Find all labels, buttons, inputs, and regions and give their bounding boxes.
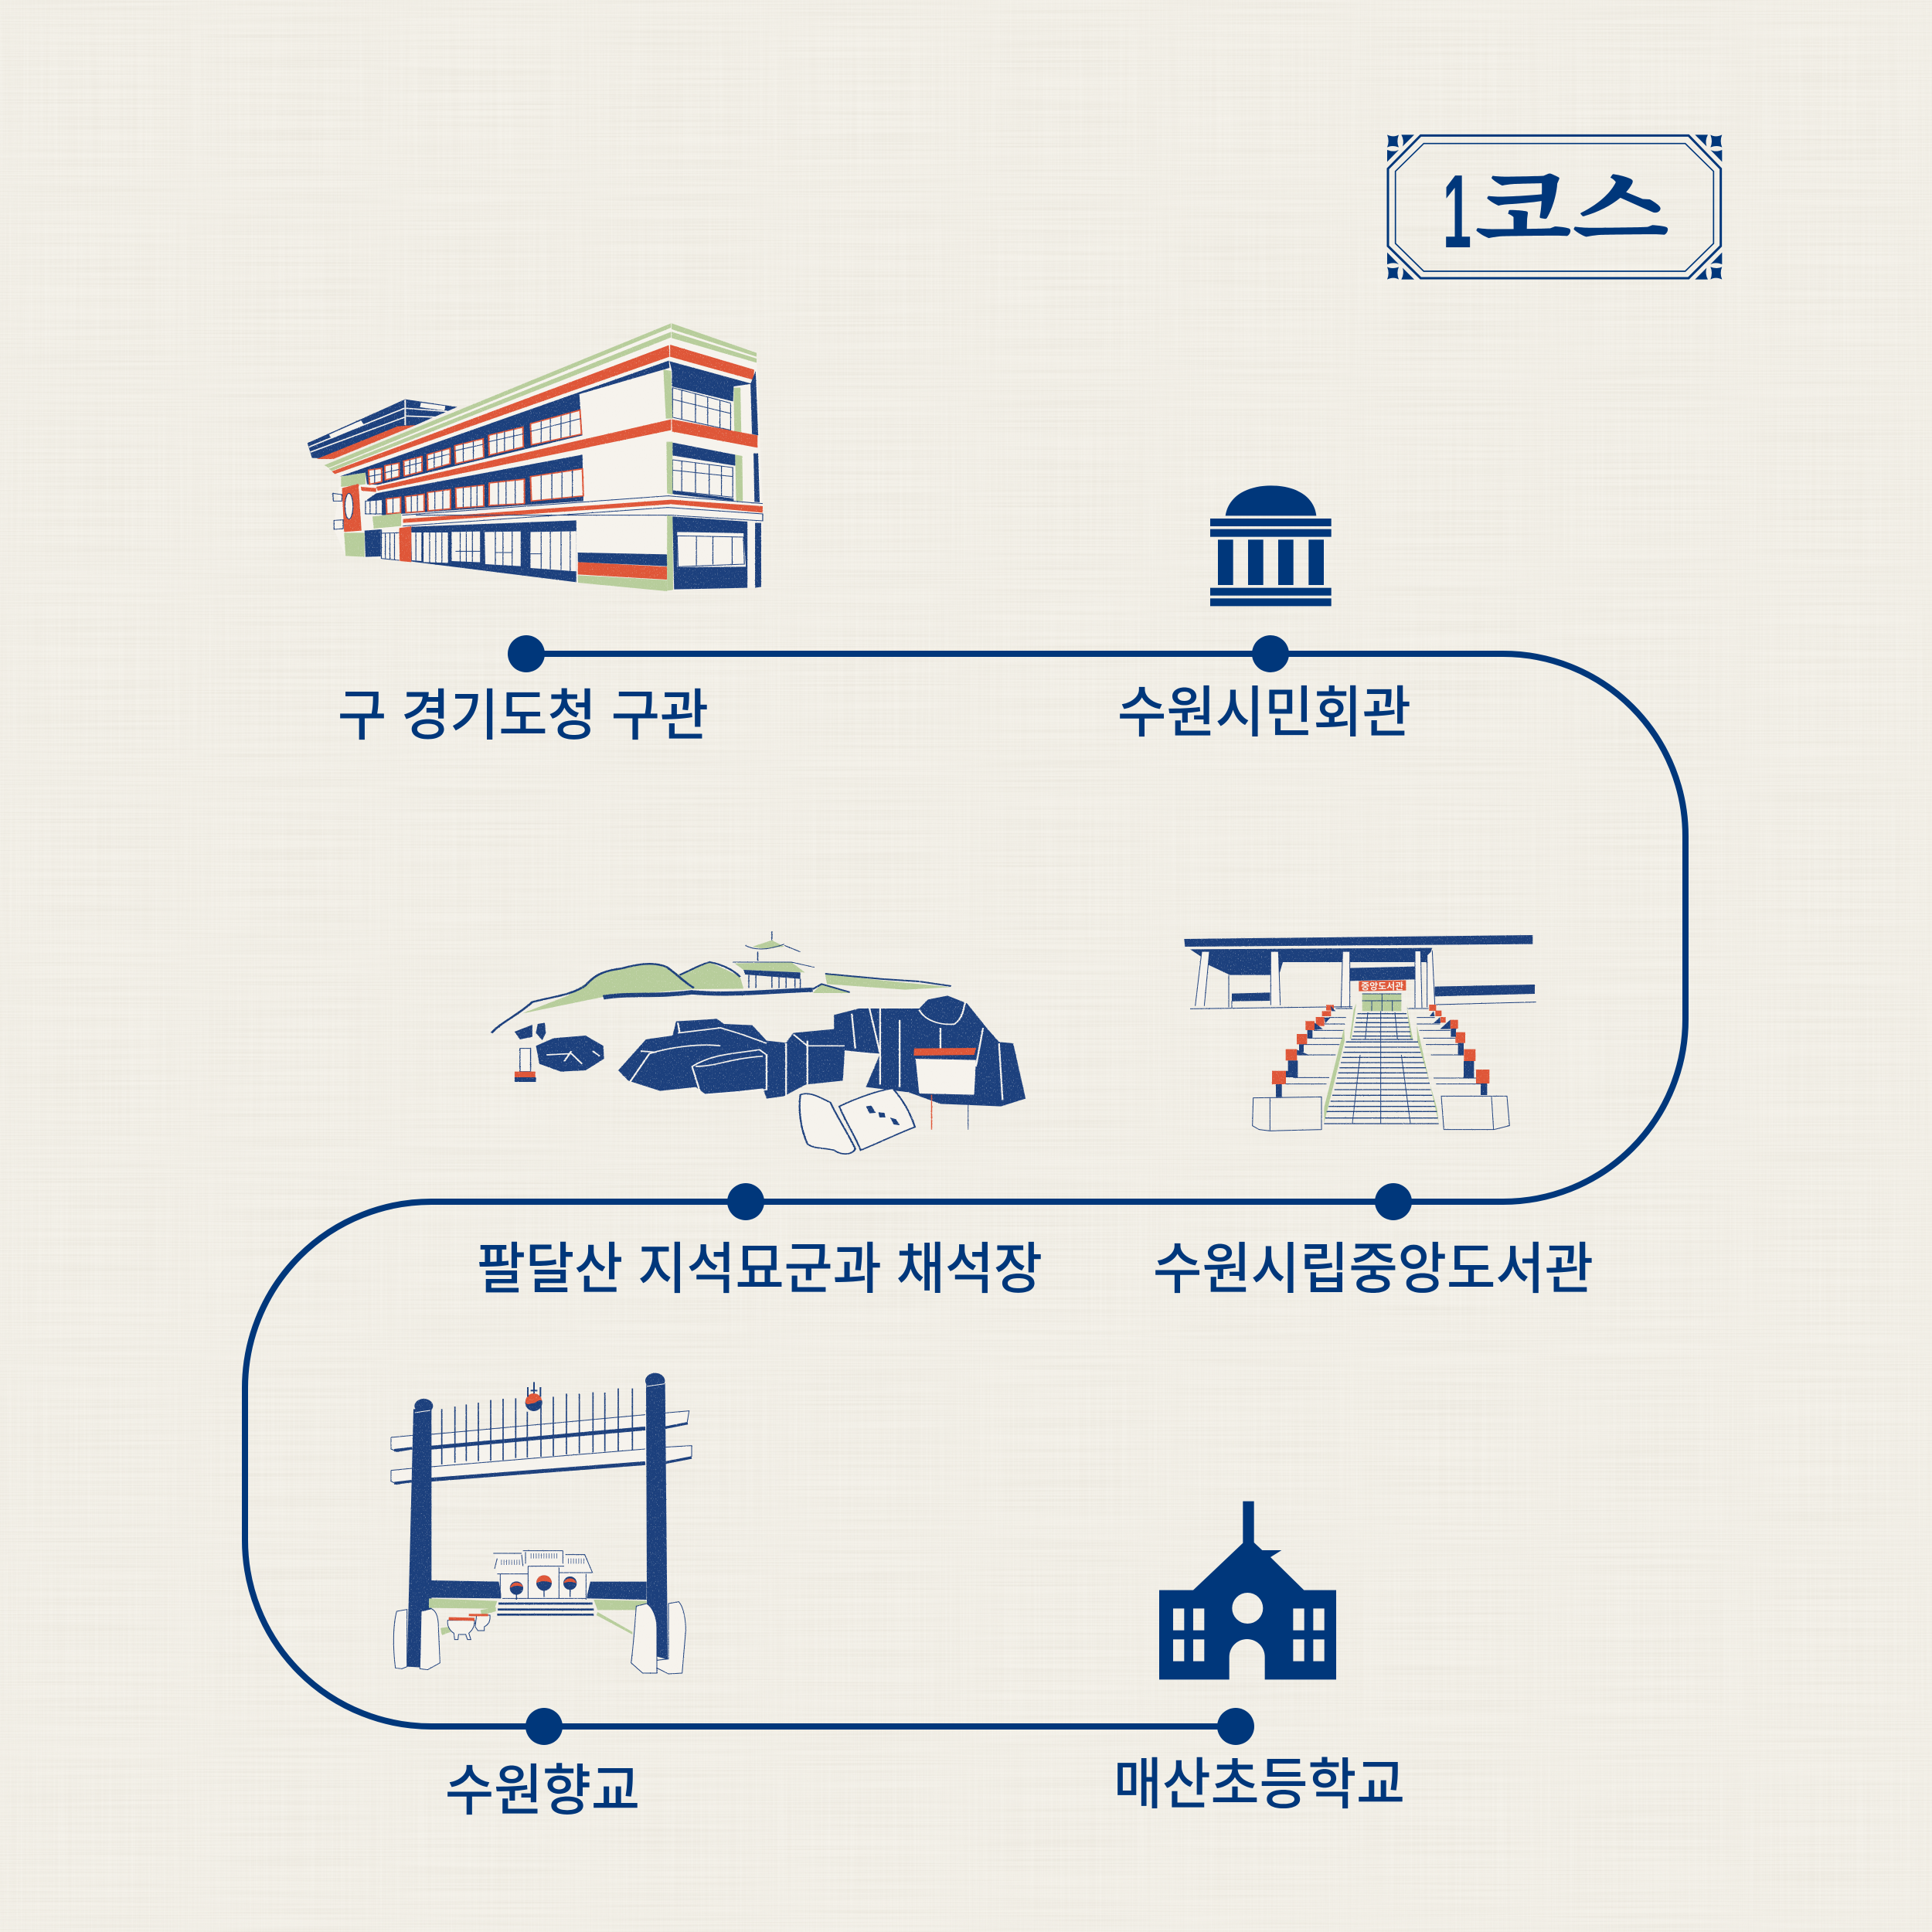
- stone bases: [393, 1602, 685, 1674]
- main stairs: [1324, 1014, 1439, 1124]
- gate posts: [407, 1373, 668, 1668]
- course badge: [1387, 134, 1722, 280]
- icon: civic hall: [1210, 485, 1332, 606]
- rock masses: [515, 995, 1026, 1107]
- route stops: [508, 635, 1412, 1745]
- info sign: [914, 1048, 976, 1130]
- upper windows: [369, 410, 581, 485]
- icon: elementary school: [1159, 1502, 1336, 1679]
- illustration: Suwon Hyanggyo gate: [391, 1373, 692, 1674]
- label: civic hall: 수원시민회관: [1117, 682, 1411, 744]
- stone marker: [515, 1049, 536, 1082]
- library sign: 중앙도서관: [1361, 981, 1404, 992]
- stair side planters: [1253, 1005, 1509, 1131]
- badge title: 1: [1443, 153, 1471, 270]
- label: old provincial office: 구 경기도청 구관: [338, 685, 709, 747]
- entrance block: [333, 473, 411, 562]
- incense burners: [447, 1614, 490, 1640]
- boulders: [800, 1094, 855, 1154]
- library sign: [1359, 980, 1406, 992]
- badge title: 코스: [1475, 163, 1669, 259]
- illustration: Suwon central library: [1184, 935, 1536, 1131]
- middle windows: [366, 469, 583, 514]
- label: Suwon Hyanggyo: 수원향교: [445, 1760, 640, 1822]
- badge title: [1443, 153, 1669, 270]
- label: Suwon central library: 수원시립중앙도서관: [1153, 1239, 1594, 1301]
- label: Paldalsan dolmen and quarry: 팔달산 지석묘군과 채석장: [477, 1239, 1043, 1301]
- illustration: old Gyeonggi provincial office: [308, 323, 763, 591]
- illustration: Paldalsan dolmen and quarry: [492, 931, 1026, 1154]
- route line: [245, 654, 1685, 1726]
- inner gate: [493, 1551, 593, 1600]
- taegeuk ornament: [526, 1382, 543, 1411]
- pavilion: [733, 931, 815, 988]
- label: Maesan elementary school: 매산초등학교: [1114, 1754, 1405, 1816]
